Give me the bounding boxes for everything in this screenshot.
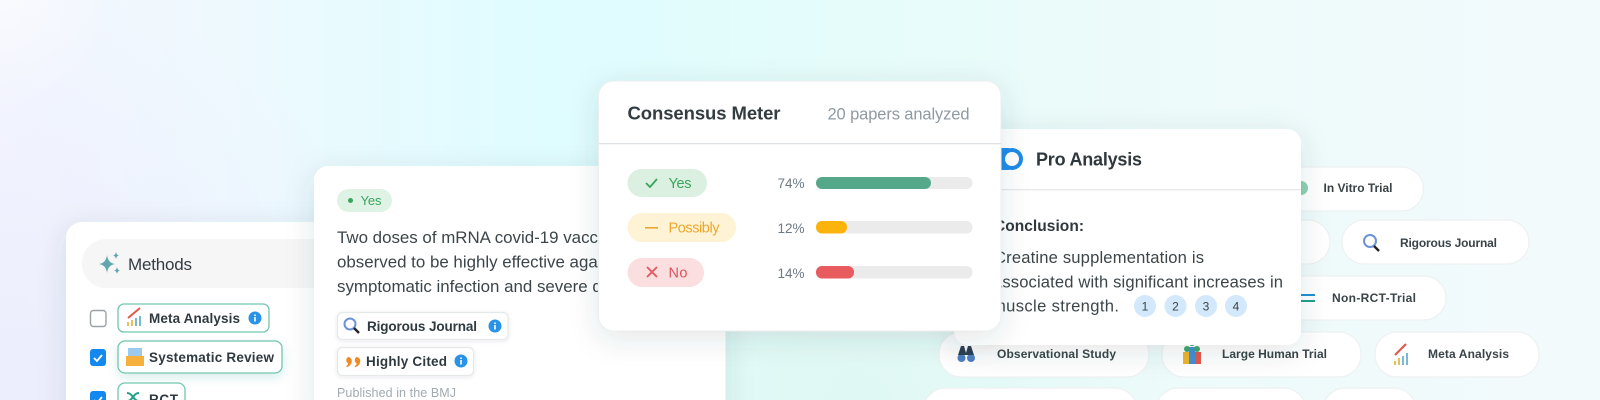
tag: Non-RCT-Trial: Non-RCT-Trial (1332, 291, 1416, 305)
panel: methods filter (66, 222, 406, 400)
answer text (337, 228, 670, 296)
icon: quote marks (346, 357, 360, 367)
option: RCT (90, 383, 185, 400)
tag: Large Human Trial: Large Human Trial (1222, 347, 1327, 361)
answer text: observed to be highly effective against (337, 252, 624, 272)
row: No: No (668, 266, 688, 282)
row: Possibly: 12% (778, 221, 805, 236)
citations (1134, 295, 1247, 317)
option: Meta Analysis: Meta Analysis (149, 311, 240, 326)
answer text: symptomatic infection and severe disease (337, 277, 651, 296)
badge: Yes: Yes (360, 193, 382, 208)
tag row five middle (1156, 388, 1306, 400)
conclusion text: muscle strength. (992, 296, 1119, 316)
chip: Highly Cited: Highly Cited (366, 354, 447, 369)
tag: Meta Analysis (1375, 332, 1539, 377)
answer text: Two doses of mRNA covid-19 vaccines were (337, 228, 670, 247)
divider (954, 189, 1301, 190)
heading: Consensus Meter: Consensus Meter (628, 102, 780, 124)
panel: consensus meter (598, 81, 1001, 331)
citations: 3 (1203, 300, 1210, 314)
icon: sparkle (99, 252, 120, 274)
tag: Meta Analysis: Meta Analysis (1428, 347, 1509, 361)
row: Possibly: Possibly (668, 220, 720, 236)
row: Yes: Yes (668, 176, 692, 192)
heading: Methods: Methods (128, 255, 192, 274)
option: Systematic Review: Systematic Review (149, 350, 274, 365)
conclusion text (992, 248, 1283, 316)
heading: Pro Analysis: Pro Analysis (1036, 150, 1142, 170)
panel: study answer card (314, 166, 726, 400)
conclusion text: Creatine supplementation is (994, 248, 1204, 267)
citations: 1 (1142, 300, 1149, 314)
chip: Rigorous Journal (338, 312, 508, 340)
tag: hidden pill (1100, 220, 1330, 264)
panel: study type tag cloud (924, 167, 1539, 400)
row: Yes (628, 169, 972, 197)
tag: Observational Study (939, 332, 1149, 377)
divider (599, 143, 1001, 144)
tag: Observational Study: Observational Study (997, 347, 1116, 361)
option: Systematic Review (90, 341, 282, 373)
tag row five left (924, 388, 1137, 400)
tag: In Vitro Trial: In Vitro Trial (1324, 181, 1392, 195)
papers analyzed note: 20 papers analyzed (828, 106, 970, 124)
row: No: 14% (778, 266, 805, 281)
chip: Highly Cited (338, 348, 474, 376)
tag: Rigorous Journal: Rigorous Journal (1400, 236, 1497, 250)
chip: Rigorous Journal: Rigorous Journal (367, 319, 477, 334)
conclusion text: associated with significant increases in (993, 272, 1283, 292)
methods header (82, 239, 362, 288)
tag: In Vitro Trial (1180, 167, 1424, 211)
subheading: Conclusion: Conclusion: (994, 218, 1084, 235)
citations: 4 (1233, 300, 1240, 314)
row: Possibly (628, 213, 972, 242)
badge: Yes (337, 189, 392, 212)
tag row five right (1323, 388, 1416, 400)
citations: 2 (1172, 300, 1179, 314)
panel: pro analysis (954, 129, 1301, 345)
icon: pro ring (992, 148, 1023, 170)
tag: Rigorous Journal (1342, 220, 1529, 264)
row: Yes: 74% (778, 176, 805, 191)
tag: Non-RCT-Trial (1200, 276, 1446, 320)
row: No (628, 258, 972, 287)
option: Meta Analysis (90, 304, 269, 332)
tag: Large Human Trial (1162, 332, 1361, 377)
source note: Published in the BMJ (337, 386, 456, 400)
